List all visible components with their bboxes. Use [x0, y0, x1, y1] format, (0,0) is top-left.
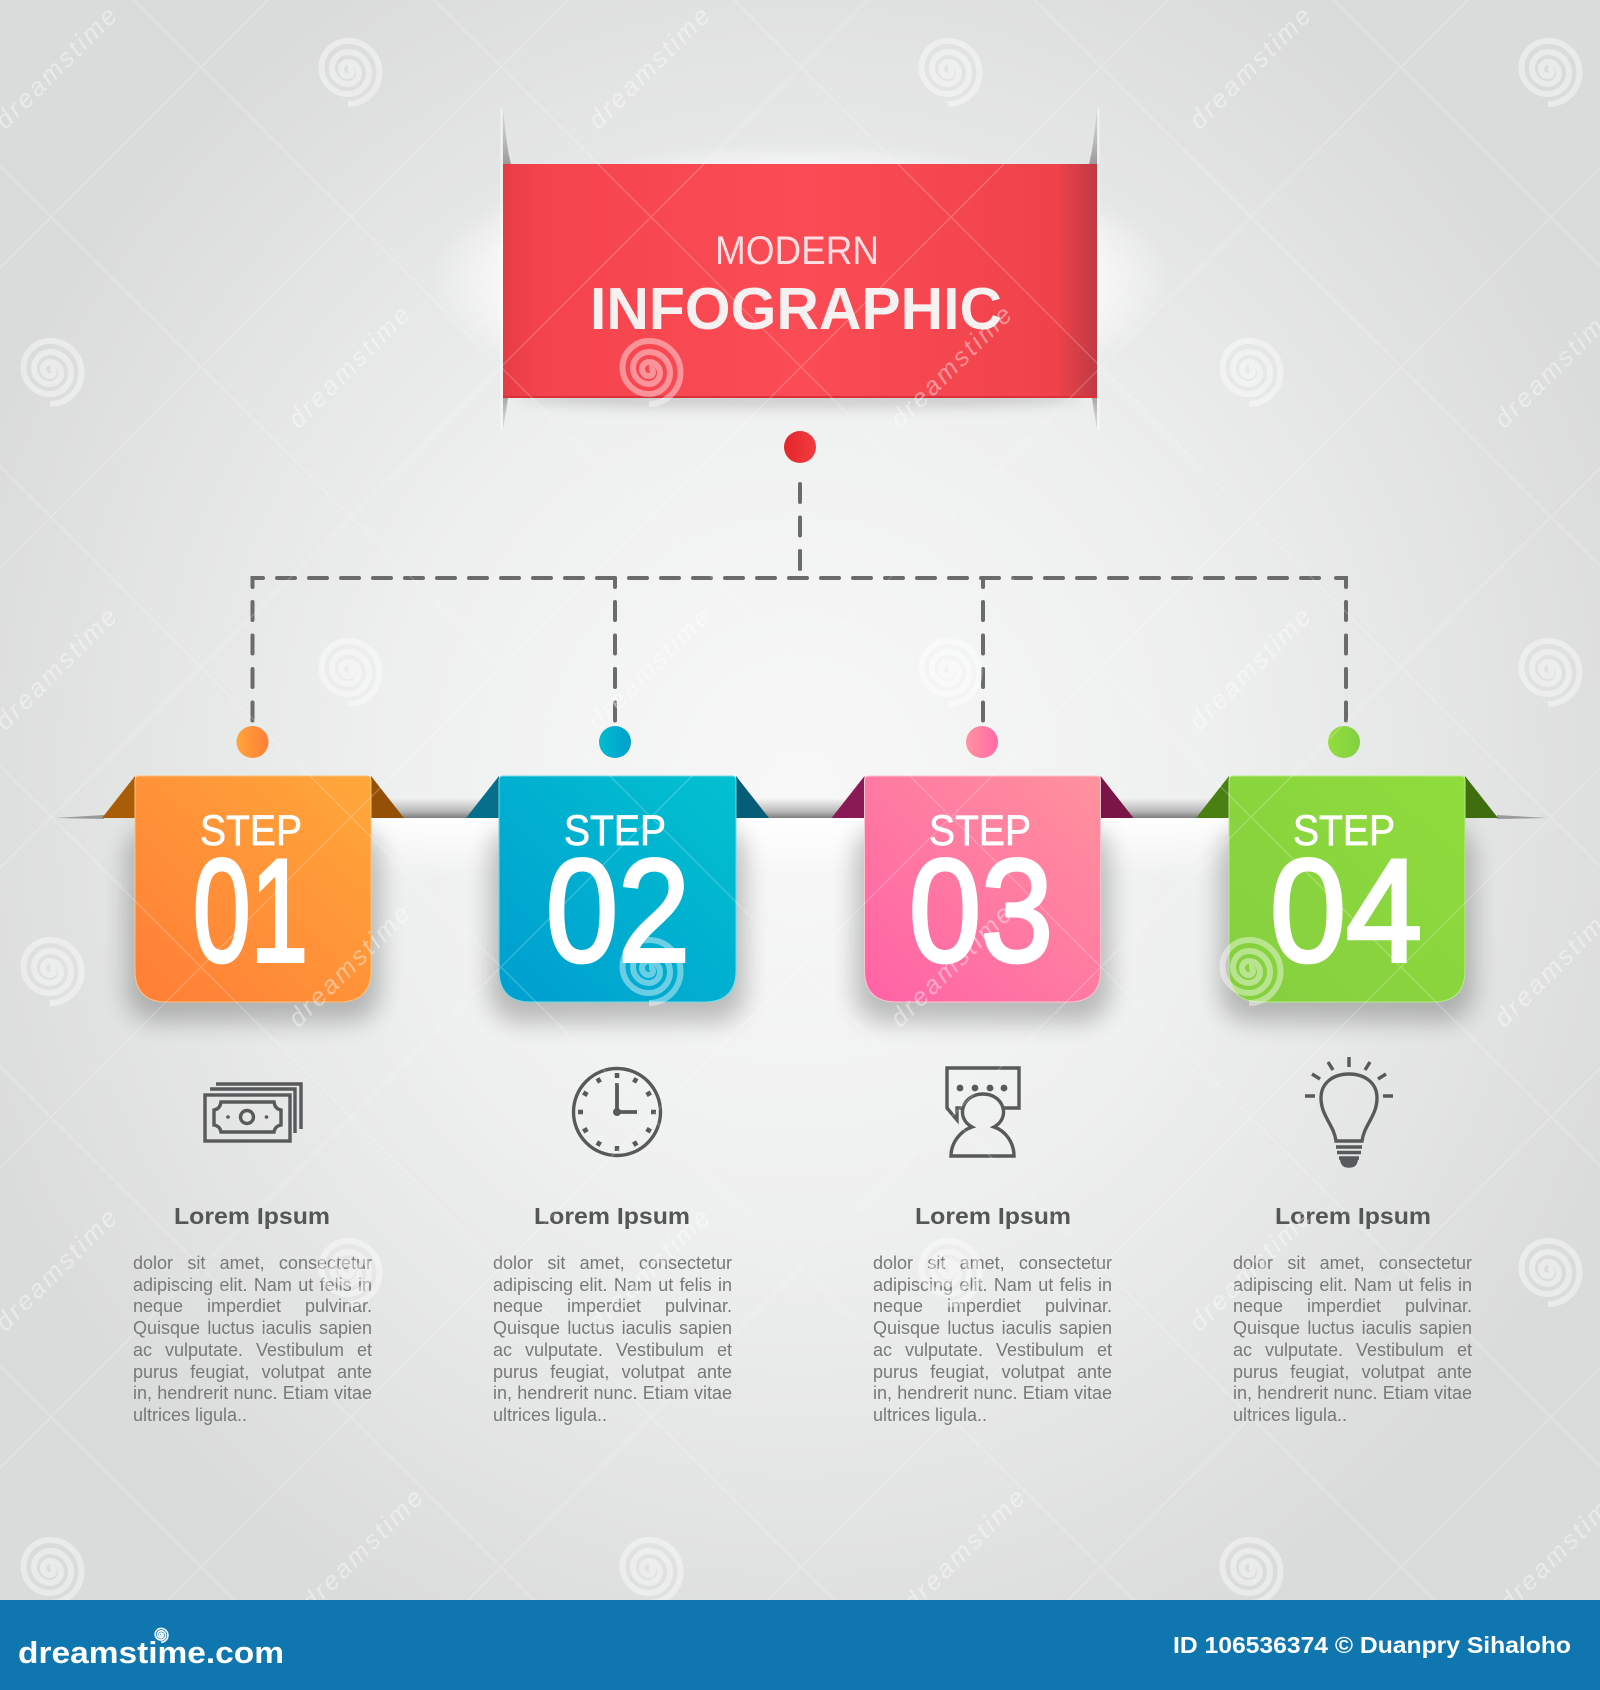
body text: column 2: purus feugiat, volutpat ante	[493, 1362, 732, 1382]
icon: light bulb	[1305, 1057, 1393, 1166]
number: 02: 02	[546, 829, 690, 992]
body text: column 3: Quisque luctus iaculis sapien	[873, 1318, 1112, 1338]
body text: column 1: neque imperdiet pulvinar.	[133, 1296, 372, 1316]
banner glow	[428, 142, 1172, 418]
watermark overlay: dreamstime	[883, 299, 1018, 434]
body text: column 1	[133, 1253, 372, 1425]
body text: column 4: ultrices ligula..	[1233, 1405, 1347, 1425]
body text: column 1: ultrices ligula..	[133, 1405, 247, 1425]
body text: column 4: purus feugiat, volutpat ante	[1233, 1362, 1472, 1382]
body text: column 1: Quisque luctus iaculis sapien	[133, 1318, 372, 1338]
body text: column 2: ultrices ligula..	[493, 1405, 607, 1425]
heading: column 2: Lorem Ipsum	[534, 1203, 690, 1229]
connector dots	[236, 726, 1360, 758]
body text: column 3: ac vulputate. Vestibulum et	[873, 1340, 1112, 1360]
horizontal slit strip	[55, 798, 1548, 878]
label: STEP: STEP	[1293, 807, 1395, 855]
body text: column 4: dolor sit amet, consectetur	[1233, 1253, 1472, 1273]
body text: column 3: dolor sit amet, consectetur	[873, 1253, 1112, 1273]
heading: column 3: Lorem Ipsum	[915, 1203, 1071, 1229]
icon: clock	[574, 1068, 660, 1156]
watermark overlay: dreamstime	[883, 898, 1018, 1033]
watermark overlay: dreamstime	[1182, 601, 1317, 736]
watermark overlay: dreamstime	[1182, 0, 1317, 135]
watermark overlay: dreamstime	[281, 299, 416, 434]
dashed connector tree	[252, 484, 1346, 722]
label: STEP: STEP	[200, 807, 302, 855]
footer bar	[0, 1600, 1600, 1690]
body text: column 4: ac vulputate. Vestibulum et	[1233, 1340, 1472, 1360]
body text: column 3: neque imperdiet pulvinar.	[873, 1296, 1112, 1316]
body text: column 2: in, hendrerit nunc. Etiam vitae	[493, 1383, 732, 1403]
number: 04: 04	[1270, 829, 1422, 992]
body text: column 3	[873, 1253, 1112, 1425]
body text: column 2: adipiscing elit. Nam ut felis in	[493, 1275, 732, 1295]
icon: money	[205, 1084, 301, 1141]
icon: person with speech bubble	[947, 1068, 1019, 1156]
watermark overlay: dreamstime	[1182, 1202, 1317, 1337]
watermark overlay: dreamstime	[581, 1202, 716, 1337]
red connector dot	[784, 431, 816, 463]
body text: column 1: dolor sit amet, consectetur	[133, 1253, 372, 1273]
heading: column 4: Lorem Ipsum	[1275, 1203, 1431, 1229]
step 04 card	[1196, 776, 1498, 1002]
body text: column 2: ac vulputate. Vestibulum et	[493, 1340, 732, 1360]
footer logo: dreamstime.com: dreamstime.com	[18, 1635, 284, 1670]
body text: column 4: neque imperdiet pulvinar.	[1233, 1296, 1472, 1316]
watermark overlay: dreamstime	[281, 898, 416, 1033]
label: STEP: STEP	[929, 807, 1031, 855]
body text: column 4: adipiscing elit. Nam ut felis in	[1233, 1275, 1472, 1295]
number: 01: 01	[193, 829, 308, 992]
body text: column 2	[493, 1253, 732, 1425]
label: STEP: STEP	[564, 807, 666, 855]
body text: column 1: in, hendrerit nunc. Etiam vitae	[133, 1383, 372, 1403]
body text: column 3: ultrices ligula..	[873, 1405, 987, 1425]
body text: column 3: in, hendrerit nunc. Etiam vitae	[873, 1383, 1112, 1403]
red title banner	[502, 108, 1098, 430]
body text: column 4: Quisque luctus iaculis sapien	[1233, 1318, 1472, 1338]
footer credit: ID 106536374 © Duanpry Sihaloho	[1173, 1632, 1571, 1658]
heading: column 1: Lorem Ipsum	[174, 1203, 330, 1229]
step 03 card	[832, 776, 1134, 1002]
body text: column 2: neque imperdiet pulvinar.	[493, 1296, 732, 1316]
watermark overlay: dreamstime	[581, 601, 716, 736]
step 01 card	[102, 776, 404, 1002]
body text: column 4	[1233, 1253, 1472, 1425]
body text: column 2: dolor sit amet, consectetur	[493, 1253, 732, 1273]
body text: column 1: purus feugiat, volutpat ante	[133, 1362, 372, 1382]
body text: column 1: ac vulputate. Vestibulum et	[133, 1340, 372, 1360]
card shadows	[126, 826, 1474, 1022]
number: 03: 03	[909, 829, 1053, 992]
watermark overlay: dreamstime	[581, 0, 716, 135]
title: MODERN: MODERN	[715, 229, 879, 273]
body text: column 3: purus feugiat, volutpat ante	[873, 1362, 1112, 1382]
title: INFOGRAPHIC: INFOGRAPHIC	[590, 276, 1002, 342]
body text: column 1: adipiscing elit. Nam ut felis in	[133, 1275, 372, 1295]
body text: column 3: adipiscing elit. Nam ut felis in	[873, 1275, 1112, 1295]
body text: column 2: Quisque luctus iaculis sapien	[493, 1318, 732, 1338]
step 02 card	[466, 776, 769, 1002]
body text: column 4: in, hendrerit nunc. Etiam vitae	[1233, 1383, 1472, 1403]
